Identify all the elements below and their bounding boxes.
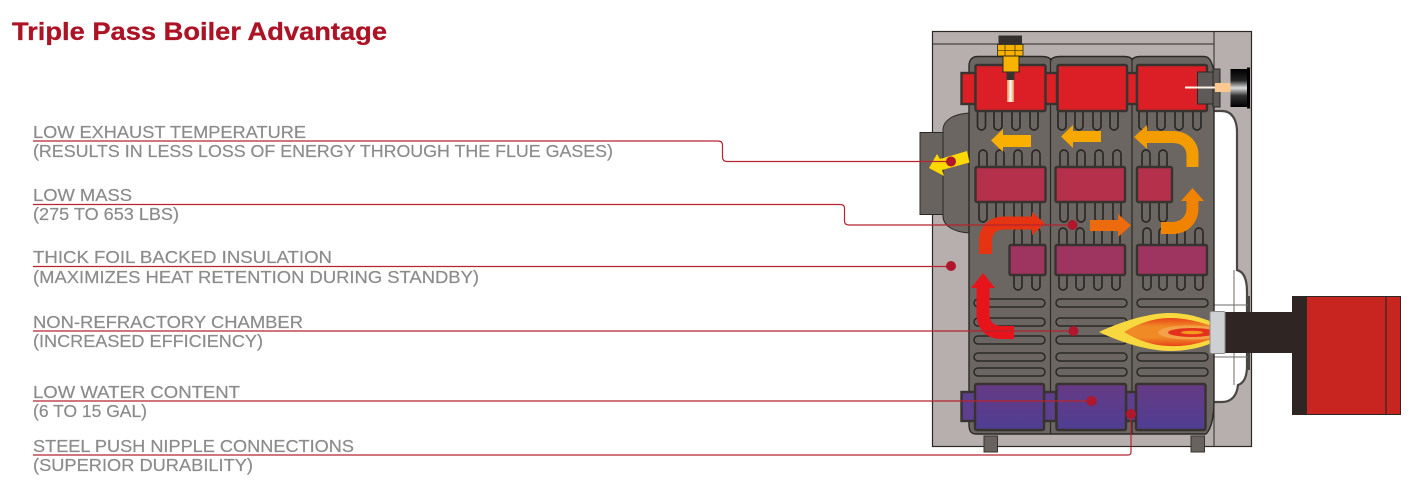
label: low water content: LOW WATER CONTENT	[33, 382, 240, 402]
title: Triple Pass Boiler Advantage	[12, 18, 387, 46]
magenta water blocks	[1010, 245, 1207, 275]
flue outlet	[920, 113, 970, 233]
arrow: first pass rising (red)	[971, 273, 1014, 332]
arrow: second pass (orange)	[1090, 214, 1131, 237]
arrow: top left (yellow-amber)	[991, 129, 1031, 152]
label: low mass	[33, 185, 179, 224]
label: thick foil backed insulation	[33, 247, 479, 287]
crimson water blocks	[976, 167, 1172, 202]
label: low exhaust temperature	[33, 122, 613, 161]
label: steel push nipple connections: (SUPERIOR DURABILITY)	[33, 455, 253, 475]
arrow: exhaust (yellow)	[929, 151, 970, 176]
label: low water content	[33, 382, 240, 421]
leader line: low water content	[33, 396, 1096, 406]
arrow: second pass rising (orange)	[1161, 188, 1204, 228]
label: non-refractory chamber	[33, 312, 303, 351]
insulated casing	[932, 31, 1252, 446]
label: low mass: (275 TO 653 LBS)	[33, 204, 179, 224]
hot water section: red headers	[962, 65, 1207, 111]
arrow: third pass left (amber)	[1061, 125, 1101, 148]
label: thick foil backed insulation: (MAXIMIZES HEAT RETENTION DURING STANDBY)	[33, 267, 479, 287]
boiler body	[969, 56, 1214, 434]
horizontal water slots	[974, 299, 1208, 376]
return water section: purple headers	[962, 384, 1206, 430]
leader line: non-refractory chamber	[33, 326, 1078, 336]
leader line: steel push nipple connections	[33, 409, 1136, 455]
label: low exhaust temperature: LOW EXHAUST TEMPERATURE	[33, 122, 306, 142]
label: steel push nipple connections	[33, 436, 354, 475]
icon: top sensor	[998, 36, 1023, 102]
boiler diagram	[920, 31, 1400, 452]
leader line: low exhaust temperature	[33, 141, 956, 166]
burner assembly	[1210, 296, 1400, 415]
leader line: low mass	[33, 204, 1078, 230]
icon: rear sight glass and plug	[1185, 68, 1250, 108]
label: low water content: (6 TO 15 GAL)	[33, 401, 147, 421]
label: steel push nipple connections: STEEL PUSH NIPPLE CONNECTIONS	[33, 436, 354, 456]
label: non-refractory chamber: (INCREASED EFFICIENCY)	[33, 331, 263, 351]
label: thick foil backed insulation: THICK FOIL BACKED INSULATION	[33, 247, 332, 267]
feet	[984, 436, 1204, 452]
label: low mass: LOW MASS	[33, 185, 132, 205]
arrow: third pass turning (amber)	[1134, 125, 1192, 167]
label: non-refractory chamber: NON-REFRACTORY CHAMBER	[33, 312, 303, 332]
leader line: insulation	[33, 261, 956, 271]
arrow: first pass turning (red-orange)	[986, 212, 1045, 254]
vertical water fins	[978, 104, 1203, 290]
label: low exhaust temperature: (RESULTS IN LESS LOSS OF ENERGY THROUGH THE FLUE GASES)	[33, 141, 613, 161]
flame	[1099, 313, 1222, 351]
